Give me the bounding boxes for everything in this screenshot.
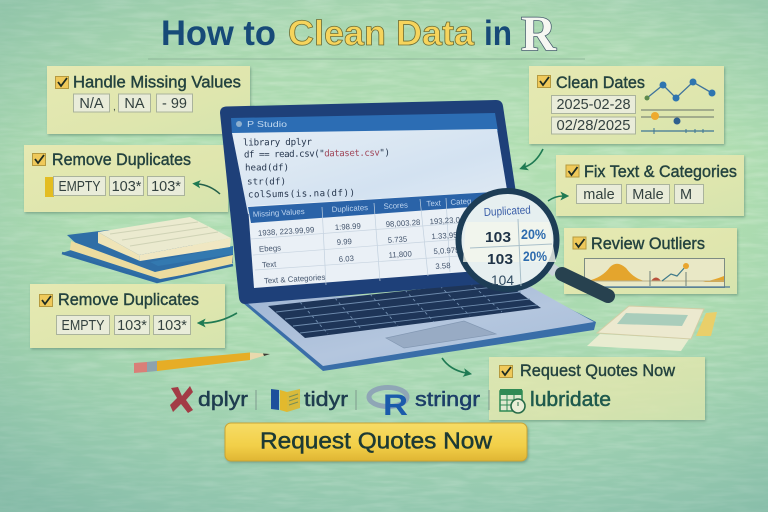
trackpad <box>386 321 496 348</box>
label: tidyr: tidyr <box>304 389 348 411</box>
arrow <box>442 358 466 373</box>
chips: NA <box>124 96 145 112</box>
chips: M <box>680 187 692 203</box>
panel: request quotes <box>489 357 705 420</box>
chips: - 99 <box>162 96 187 112</box>
label: stringr: stringr <box>415 389 480 411</box>
chips: 103* <box>151 179 181 195</box>
package logos row <box>170 386 611 422</box>
date chips <box>552 96 636 134</box>
heading: Remove Duplicates <box>58 291 199 309</box>
laptop base <box>243 280 596 371</box>
data table: Categ <box>450 197 472 207</box>
heading: Request Quotes Now <box>520 362 675 380</box>
upper white book <box>98 217 231 255</box>
icon: R logo: R <box>383 389 408 422</box>
heading: Clean Dates <box>556 74 645 92</box>
handle <box>548 266 608 296</box>
magnifying glass: 103 <box>485 229 511 246</box>
icon: checkbox <box>56 76 68 88</box>
data table: Text <box>426 198 442 208</box>
data table: Text <box>262 260 277 270</box>
icon: tidyr <box>271 389 300 412</box>
chips: , <box>113 102 116 113</box>
table header <box>248 191 512 223</box>
data table: 6.03 <box>338 254 354 264</box>
screen title bar: P Studio <box>247 119 287 129</box>
chips <box>56 316 190 334</box>
data table: Text & Categories <box>264 273 326 285</box>
keyboard <box>268 280 541 338</box>
laptop <box>220 100 596 371</box>
chips: EMPTY <box>62 318 105 334</box>
title <box>161 5 557 61</box>
chips: EMPTY <box>58 179 101 195</box>
data table: 5.735 <box>387 235 408 245</box>
data table: 5,0.975 <box>433 245 460 256</box>
data table: 3.58 <box>435 261 451 271</box>
books <box>62 217 233 282</box>
heading: Handle Missing Values <box>73 74 241 92</box>
icon: checkbox <box>32 154 46 166</box>
chips: male <box>583 187 615 203</box>
code editor: colSums(is.na(df)) <box>248 188 355 200</box>
data table: Scores <box>383 201 408 211</box>
label: dplyr: dplyr <box>198 389 248 411</box>
heading: Remove Duplicates <box>52 151 191 169</box>
chips <box>45 176 184 197</box>
data table: 9.99 <box>336 237 352 247</box>
code editor: library dplyr <box>243 137 312 148</box>
icon: checkbox <box>500 366 512 378</box>
magnifying glass: 103 <box>487 251 513 268</box>
chips: N/A <box>79 96 104 112</box>
icon: checkbox <box>573 237 586 249</box>
magnifying glass: 20% <box>523 248 547 264</box>
code editor: head(df) <box>245 162 289 174</box>
chips: 103* <box>117 318 147 334</box>
arrow <box>548 196 563 201</box>
magnifying glass: Duplicated <box>484 205 531 219</box>
code editor: df == read.csv("dataset.csv") <box>244 147 390 160</box>
screen title bar <box>231 113 498 134</box>
arrow <box>203 313 237 323</box>
magnifying glass: 104 <box>491 272 514 288</box>
data table: Ebegs <box>259 243 281 254</box>
chips <box>74 94 192 113</box>
icon: checkbox <box>566 165 579 177</box>
data table <box>248 191 518 288</box>
papers <box>587 306 717 351</box>
data table: 1.33,95 <box>431 231 458 241</box>
chips: 103* <box>112 179 142 195</box>
button: request quotes now <box>225 423 527 461</box>
label: lubridate: lubridate <box>530 389 611 411</box>
magnifying glass <box>458 191 608 296</box>
data table: 98,003.28 <box>385 218 421 229</box>
chips: 103* <box>157 318 187 334</box>
arrow <box>198 184 220 194</box>
title: How to: How to <box>161 14 276 53</box>
chips <box>576 184 704 204</box>
outlier chart <box>584 258 730 288</box>
pencil <box>134 352 270 373</box>
icon: checkbox <box>538 76 550 88</box>
panel: handle missing values <box>47 66 250 134</box>
icon: dplyr <box>170 386 193 413</box>
icon: lubridate <box>500 389 525 413</box>
date chips: 02/28/2025 <box>556 118 630 134</box>
lower blue book <box>62 230 233 282</box>
title: R logo: R <box>521 5 557 61</box>
date chips: 2025-02-28 <box>556 97 630 113</box>
data table: Missing Values <box>253 207 305 219</box>
panel: remove duplicates lower <box>30 284 237 348</box>
panel: clean dates <box>529 66 724 144</box>
data table: 11,800 <box>388 249 413 260</box>
panel: review outliers <box>564 228 737 294</box>
line chart <box>641 78 716 134</box>
data table: 1:98.99 <box>335 221 361 232</box>
chips: Male <box>632 187 664 203</box>
heading: Review Outliers <box>591 235 705 253</box>
title: in: in <box>484 14 512 53</box>
data table: Duplicates <box>331 203 368 214</box>
button: request quotes now: Request Quotes Now <box>260 428 492 454</box>
laptop screen bezel <box>220 100 529 304</box>
code editor: str(df) <box>247 176 286 188</box>
panel: remove duplicates upper <box>24 145 228 212</box>
icon: R logo <box>369 388 408 422</box>
data table: 1938, 223.99,99 <box>258 225 315 238</box>
panel: fix text and categories <box>556 155 744 216</box>
lens <box>458 191 556 289</box>
magnifying glass: 20% <box>521 226 546 242</box>
code editor <box>232 129 508 214</box>
icon: checkbox <box>40 294 52 306</box>
heading: Fix Text & Categories <box>584 163 737 181</box>
arrow <box>525 149 543 167</box>
data table: 193,23.0 <box>429 215 461 226</box>
title: Clean Data: Clean Data <box>288 14 475 53</box>
